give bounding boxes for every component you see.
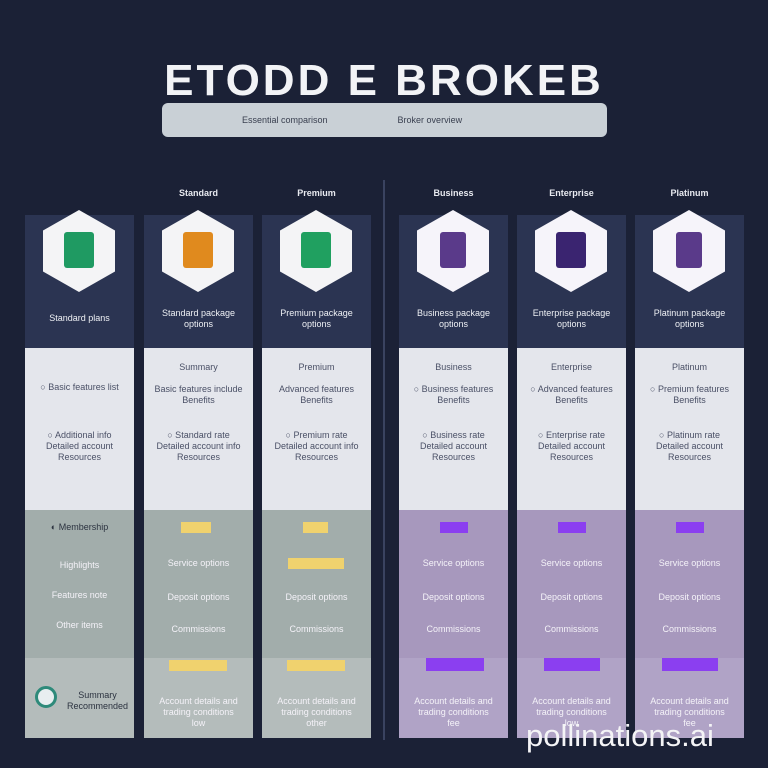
panel: column 3: ○ Premium rate bbox=[286, 430, 347, 440]
icon: dark purple hex bbox=[535, 210, 607, 292]
panel: column 4: Business bbox=[435, 362, 472, 372]
panel: column 1: Standard plans bbox=[49, 313, 110, 323]
panel: column 6: fee bbox=[683, 718, 696, 728]
panel: column 2: low bbox=[192, 718, 205, 728]
panel: column 5: low bbox=[565, 718, 578, 728]
watermark: pollinations.ai bbox=[526, 718, 714, 753]
panel: column 4: fee bbox=[447, 718, 460, 728]
title: ETODD E BROKEB bbox=[164, 56, 604, 105]
panel: column 6: Benefits bbox=[673, 395, 706, 405]
panel: column 2: Account details and bbox=[159, 696, 238, 706]
panel: column 3: trading conditions bbox=[281, 707, 352, 717]
panel: column 2: Summary bbox=[179, 362, 218, 372]
panel: column 3: options bbox=[302, 319, 331, 329]
text: Enterprise bbox=[549, 188, 594, 198]
panel: column 1: Highlights bbox=[60, 560, 99, 570]
text: Premium bbox=[297, 188, 336, 198]
panel: column 5: Enterprise bbox=[551, 362, 592, 372]
panel: column 4: ○ Business rate bbox=[422, 430, 485, 440]
panel: column 5: Commissions bbox=[544, 624, 598, 634]
subtitle pill bbox=[162, 103, 607, 137]
panel: column 6 bbox=[635, 215, 744, 738]
panel: column 2: ○ Standard rate bbox=[167, 430, 230, 440]
panel: column 1: Recommended bbox=[67, 701, 128, 711]
panel: column 6: Platinum bbox=[672, 362, 707, 372]
panel: column 5: Enterprise package bbox=[533, 308, 610, 318]
panel: column 2: Service options bbox=[168, 558, 229, 568]
panel: column 5: Resources bbox=[550, 452, 593, 462]
panel: column 2: Basic features include bbox=[154, 384, 243, 394]
panel: column 1: Other items bbox=[56, 620, 103, 630]
panel: column 4: ○ Business features bbox=[414, 384, 493, 394]
icon: green hex bbox=[43, 210, 115, 292]
panel: column 6: trading conditions bbox=[654, 707, 725, 717]
panel: column 3: Commissions bbox=[289, 624, 344, 634]
panel: column 5: Benefits bbox=[555, 395, 588, 405]
panel: column 1: Detailed account bbox=[46, 441, 113, 451]
panel: column 1: Summary bbox=[78, 690, 117, 700]
panel: column 4: Business package bbox=[417, 308, 490, 318]
text: Business bbox=[433, 188, 474, 198]
panel: column 6: Deposit options bbox=[658, 592, 721, 602]
panel: column 2: Resources bbox=[177, 452, 220, 462]
panel: column 5: Deposit options bbox=[540, 592, 603, 602]
icon: orange hex bbox=[162, 210, 234, 292]
subtitle pill: Essential comparison Broker overview bbox=[242, 115, 462, 125]
panel: column 3: Resources bbox=[295, 452, 338, 462]
panel: column 5: trading conditions bbox=[536, 707, 607, 717]
panel: column 2: Benefits bbox=[182, 395, 215, 405]
panel: column 3 bbox=[262, 215, 371, 738]
panel: column 2: Deposit options bbox=[167, 592, 230, 602]
panel: column 3: Benefits bbox=[300, 395, 333, 405]
panel: column 5: ○ Enterprise rate bbox=[538, 430, 605, 440]
panel: column 6: options bbox=[675, 319, 704, 329]
panel: column 4 bbox=[399, 215, 508, 738]
panel: column 2: options bbox=[184, 319, 213, 329]
panel: column 6: Commissions bbox=[662, 624, 716, 634]
icon: green hex bbox=[280, 210, 352, 292]
panel: column 3: Premium bbox=[298, 362, 334, 372]
panel: column 1: ○ Additional info bbox=[48, 430, 111, 440]
panel: column 4: Deposit options bbox=[422, 592, 485, 602]
column headers: Standard bbox=[179, 188, 218, 198]
panel: column 4: Resources bbox=[432, 452, 475, 462]
panel: column 4: Account details and bbox=[414, 696, 493, 706]
panel: column 2 bbox=[144, 215, 253, 738]
panel: column 5: ○ Advanced features bbox=[530, 384, 613, 394]
panel: column 1 bbox=[25, 215, 134, 738]
panel: column 5 bbox=[517, 215, 626, 738]
panel: column 1: ◐ Membership bbox=[51, 522, 108, 532]
panel: column 4: Detailed account bbox=[420, 441, 487, 451]
panel: column 4: Benefits bbox=[437, 395, 470, 405]
icon: purple hex bbox=[417, 210, 489, 292]
panel: column 6: Platinum package bbox=[654, 308, 725, 318]
panel: column 4: Service options bbox=[423, 558, 484, 568]
panel: column 6: Account details and bbox=[650, 696, 729, 706]
panel: column 3: Account details and bbox=[277, 696, 356, 706]
panel: column 3: Deposit options bbox=[285, 592, 348, 602]
divider bbox=[383, 180, 385, 740]
panel: column 5: options bbox=[557, 319, 586, 329]
panel: column 6: Resources bbox=[668, 452, 711, 462]
panel: column 5: Account details and bbox=[532, 696, 611, 706]
panel: column 2: Detailed account info bbox=[156, 441, 241, 451]
panel: column 1: ○ Basic features list bbox=[40, 382, 119, 392]
panel: column 4: options bbox=[439, 319, 468, 329]
panel: column 6: Service options bbox=[659, 558, 720, 568]
panel: column 2: trading conditions bbox=[163, 707, 234, 717]
panel: column 3: Detailed account info bbox=[274, 441, 359, 451]
panel: column 2: Standard package bbox=[162, 308, 235, 318]
panel: column 5: Detailed account bbox=[538, 441, 605, 451]
icon: purple hex bbox=[653, 210, 725, 292]
panel: column 3: Premium package bbox=[280, 308, 353, 318]
panel: column 1: Resources bbox=[58, 452, 101, 462]
panel: column 3: Advanced features bbox=[279, 384, 354, 394]
panel: column 6: Detailed account bbox=[656, 441, 723, 451]
panel: column 6: ○ Premium features bbox=[650, 384, 729, 394]
text: Platinum bbox=[670, 188, 708, 198]
panel: column 5: Service options bbox=[541, 558, 602, 568]
panel: column 4: Commissions bbox=[426, 624, 480, 634]
panel: column 3: other bbox=[306, 718, 327, 728]
panel: column 1: Features note bbox=[52, 590, 107, 600]
panel: column 2: Commissions bbox=[171, 624, 226, 634]
panel: column 4: trading conditions bbox=[418, 707, 489, 717]
panel: column 6: ○ Platinum rate bbox=[659, 430, 720, 440]
